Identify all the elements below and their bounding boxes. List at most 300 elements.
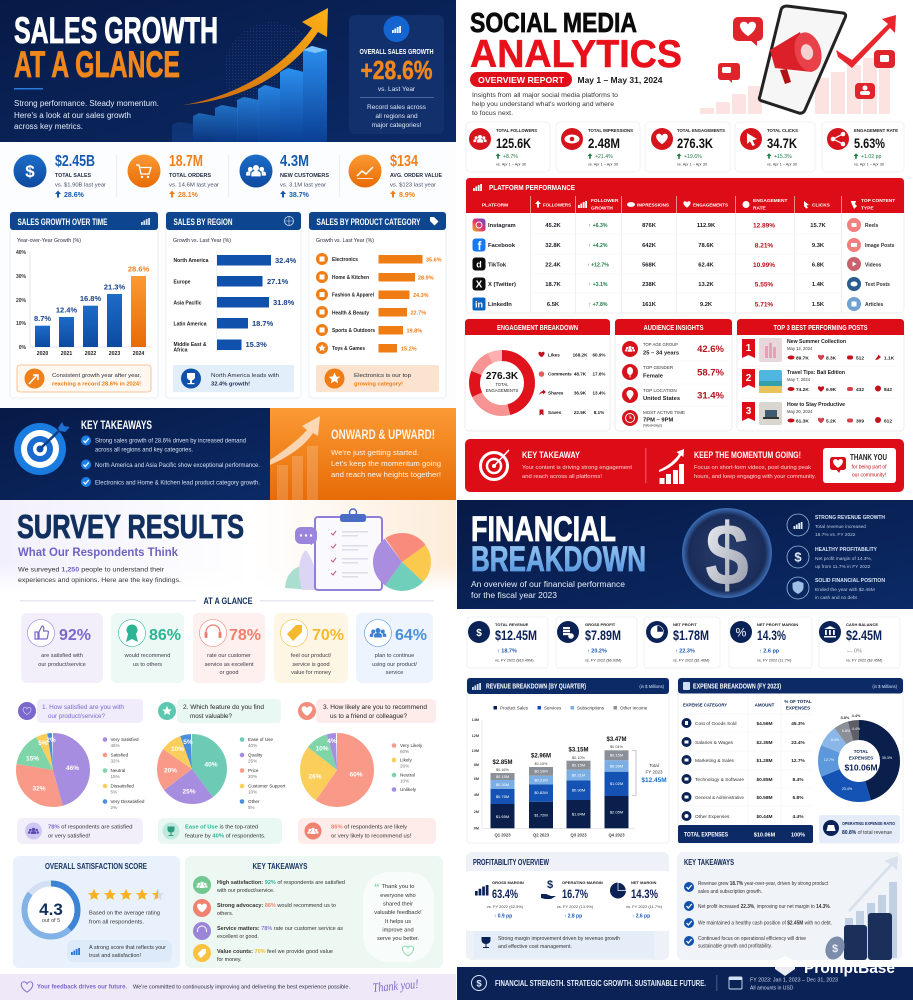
post 3: May 20, 2024 — [787, 409, 813, 414]
kpi: engagement rate: 5.63% — [854, 135, 885, 151]
donut: expenses: TOTAL — [854, 749, 869, 754]
callout: ease of use: feature by 40% of respondents. — [185, 834, 266, 840]
takeaway list: Continued focus on operational efficiency will drive — [698, 936, 806, 942]
icon: momentum chart — [659, 449, 684, 484]
platform logos: in — [475, 300, 483, 310]
table rows: 6.5K — [547, 302, 560, 308]
table rows — [488, 222, 827, 308]
callout: satisfied — [17, 818, 143, 844]
card: audience insights: TOP AGE GROUP — [643, 342, 678, 347]
card: profitability overview — [466, 852, 669, 960]
metric: operating margin: vs. FY 2022 (13.9%) — [557, 904, 594, 909]
metric: operating margin — [541, 879, 603, 920]
table header row: TOP CONTENT — [861, 198, 895, 204]
pie: satisfaction: 46% — [66, 765, 79, 772]
thank you note: everyone who — [380, 893, 416, 899]
table rows: LinkedIn — [488, 302, 512, 308]
table: platform performance: PLATFORM PERFORMANCE — [489, 183, 575, 192]
table rows: 45.2K — [545, 223, 562, 229]
expense table: Other Expenses — [695, 814, 730, 820]
score note: A strong score that reflects your — [89, 945, 166, 951]
bar chart: yoy growth: 21.3% — [104, 283, 125, 292]
kpi: total followers: vs. Apr 1 – Apr 30 — [496, 162, 526, 166]
card: overall satisfaction score: OVERALL SATISFACTION SCORE — [45, 862, 148, 871]
expense table: $0.44M — [756, 814, 773, 820]
callout: north america leads: 32.4% growth! — [211, 382, 250, 388]
score ring: out of 5 — [42, 918, 60, 924]
stacked bar chart: $0.31M — [572, 772, 585, 778]
donut legend: Likes — [548, 352, 560, 358]
stacked bar chart: $1.72M — [534, 812, 548, 818]
takeaway list: Revenue grew 18.7% year-over-year, driven by strong product — [698, 881, 829, 887]
card: expense breakdown: EXPENSE BREAKDOWN (FY 2023) — [693, 682, 781, 690]
post 2: 842 — [884, 387, 892, 393]
card: engagement breakdown — [465, 319, 610, 431]
callout: recommend: or very likely to recommend us! — [331, 834, 412, 840]
kpi: net profit: vs. FY 2022 ($1.46M) — [673, 658, 710, 662]
card: engagement breakdown: ENGAGEMENT BREAKDOWN — [497, 323, 578, 332]
pie: likelihood to recommend: 60% — [349, 772, 363, 778]
stacked bar chart: $0.21M — [534, 778, 548, 782]
post 3: How to Stay Productive — [787, 402, 846, 408]
bar chart: yoy growth: 28.6% — [128, 265, 149, 274]
takeaway items: others. — [217, 911, 233, 917]
card: sales by product category: Growth vs. Last Year (%) — [316, 238, 374, 244]
top content type column: Image Posts — [865, 243, 895, 249]
callout: north america leads — [173, 365, 294, 392]
stacked bar chart: 8M — [474, 763, 479, 767]
card: expense breakdown — [678, 678, 903, 843]
takeaway list: Strong sales growth of 28.6% driven by increased demand — [95, 438, 246, 444]
kpi: total impressions: vs. Apr 1 – Apr 30 — [588, 162, 618, 166]
kpi: gross profit: vs. FY 2022 ($6.93M) — [585, 658, 622, 662]
stat card: 86 percent: us to others — [133, 662, 162, 668]
top content type column: Videos — [865, 262, 882, 268]
post 1: 512 — [856, 356, 864, 362]
card: audience insights: Female — [643, 374, 664, 380]
panel: financial breakdown — [457, 500, 913, 1000]
donut: expenses: 35.3% — [882, 756, 893, 760]
kpi: engagement rate: vs. Apr 1 – Apr 30 — [854, 162, 884, 166]
kpi: total sales: $ — [25, 162, 35, 181]
stat card: 70 percent — [274, 613, 348, 683]
table header row: CLICKS — [812, 202, 831, 208]
legend: satisfaction: 46% — [110, 743, 120, 748]
social intro text: help you understand what's working and where — [472, 102, 615, 108]
pie: valuable feature: 5% — [183, 739, 193, 746]
social title — [470, 7, 682, 76]
overall growth card: OVERALL SALES GROWTH — [360, 47, 434, 56]
question 3: 3. How likely are you to recommend — [323, 704, 427, 711]
score ring: 4.3 — [39, 900, 63, 919]
table rows: 112.9K — [697, 223, 716, 229]
kpi: average order value: vs. $123 last year — [390, 182, 436, 188]
question 1: 1. How satisfied are you with — [42, 704, 124, 711]
stacked bar chart: Q1 2023 — [494, 832, 511, 838]
kpi: net profit margin — [729, 617, 812, 668]
donut: expenses: 4.4% — [852, 727, 861, 731]
table header row: ENGAGEMENT — [753, 198, 787, 204]
kpi: total revenue: TOTAL REVENUE — [495, 622, 529, 627]
stacked bar chart: $0.15M — [496, 774, 509, 779]
kpi: new customers: NEW CUSTOMERS — [280, 173, 330, 179]
chart legend — [494, 706, 648, 710]
stacked bar chart: $1.65M — [496, 814, 509, 819]
expense table: $4.56M — [756, 721, 773, 727]
band: key takeaways: KEY TAKEAWAYS — [81, 418, 152, 432]
overall growth card: all regions and — [375, 113, 418, 120]
donut: engagement — [474, 356, 530, 410]
callout: margin improvement: Strong margin improvement driven by revenue growth — [498, 936, 620, 942]
metric: gross margin — [475, 880, 524, 920]
metric: gross margin: ↑ 0.9 pp — [494, 914, 512, 920]
platform logos: f — [478, 239, 482, 253]
bar chart: growth by category: 22.7% — [410, 310, 426, 316]
kpi: cash balance — [819, 617, 900, 668]
bar chart: yoy growth: 20% — [16, 298, 27, 304]
icon: red target — [480, 450, 509, 480]
card: audience insights: AUDIENCE INSIGHTS — [644, 323, 704, 332]
card: audience insights — [615, 319, 732, 431]
table rows: 8.21% — [755, 242, 773, 250]
sales hero banner — [0, 0, 456, 142]
table rows: Instagram — [488, 223, 516, 229]
watermark: promptbase — [775, 956, 895, 977]
stat card: 64 percent: plan to continue — [375, 653, 414, 659]
legend: likelihood — [392, 743, 423, 792]
donut legend — [538, 352, 606, 416]
stat card: 78 percent: rate our customer — [207, 653, 251, 659]
kpi: total followers — [466, 122, 550, 172]
bar chart: growth by region: Latin America — [174, 322, 207, 328]
card: sales by product category — [309, 212, 446, 398]
stacked bar chart: Q2 2023 — [533, 832, 550, 838]
legend: satisfaction — [103, 737, 145, 810]
card: revenue breakdown by quarter: (in $ Millions) — [639, 684, 665, 689]
card: financial key takeaways — [677, 852, 902, 963]
kpi: average order value: AVG. ORDER VALUE — [390, 173, 443, 179]
takeaway items: for money. — [217, 957, 242, 963]
chart legend: Product Sales — [500, 706, 529, 710]
donut: expenses: 8.4% — [831, 738, 840, 742]
kpi: total sales: vs. $1.90B last year — [55, 182, 106, 188]
donut: expenses: 5.8% — [841, 716, 850, 720]
kpi: average order value: 8.9% — [399, 192, 416, 199]
question 2: 2. Which feature do you find — [183, 704, 264, 711]
metric: operating margin: OPERATING MARGIN — [562, 880, 603, 885]
card: sales by region — [166, 212, 301, 398]
top content type column: Articles — [865, 302, 884, 308]
table header row: GROWTH — [591, 206, 613, 212]
card: engagement breakdown: 276.3K — [486, 371, 519, 382]
band: key takeaway red: Focus on short-form videos, post during peak — [694, 465, 811, 471]
kpi: total sales: TOTAL SALES — [55, 173, 92, 179]
stacked bar chart: 4M — [474, 793, 479, 797]
kpi: new customers — [240, 153, 330, 199]
thank you card — [823, 448, 896, 483]
highlight: solid financial position: SOLID FINANCIAL POSITION — [815, 578, 885, 584]
survey intro text: We surveyed 1,250 people to understand their — [18, 566, 165, 574]
callout: ease of use: Ease of Use is the top-rated — [185, 824, 258, 830]
kpi: total engagements: 276.3K — [677, 135, 713, 151]
stacked bar chart: Q4 2023 — [608, 832, 625, 838]
stacked bar chart: Q3 2023 — [570, 832, 587, 838]
chart legend: Services — [544, 706, 562, 710]
bar chart: growth by category: 15.2% — [401, 346, 417, 352]
kpi: total engagements: vs. Apr 1 – Apr 30 — [677, 162, 707, 166]
legend: likelihood: Neutral — [400, 772, 415, 778]
legend: satisfaction: 2% — [110, 805, 117, 810]
stacked bar chart: $0.30M — [496, 782, 509, 787]
table: platform performance — [466, 178, 904, 313]
pie: satisfaction: 5% — [38, 740, 48, 747]
sales intro text: Here's a look at our sales growth — [14, 111, 131, 120]
donut legend: 168.2K — [573, 352, 588, 358]
bar chart: yoy growth: 30% — [16, 274, 27, 280]
thank you card: for being part of — [851, 464, 887, 470]
report pill and date: OVERVIEW REPORT — [478, 75, 565, 85]
table rows: ↑ +6.3% — [589, 223, 608, 229]
table header row: FOLLOWER — [591, 198, 619, 204]
kpi: total clicks: vs. Apr 1 – Apr 30 — [767, 162, 797, 166]
stat card: 78 percent: 78% — [229, 627, 261, 644]
kpi: engagement rate: ENGAGEMENT RATE — [854, 128, 898, 133]
card: sales by region: Growth vs. Last Year (%) — [173, 238, 231, 244]
card: sales growth over time — [10, 212, 158, 398]
kpi: gross profit: GROSS PROFIT — [585, 622, 616, 627]
overall growth card: +28.6% — [360, 55, 432, 85]
donut legend: Comments — [548, 372, 572, 376]
kpi: total orders: 28.1% — [178, 192, 199, 199]
expense table: 23.4% — [791, 740, 806, 746]
question 1 — [17, 699, 145, 844]
stacked bar chart: FY 2023 — [646, 770, 663, 774]
stacked bar chart: $0.19M — [534, 768, 548, 774]
question 2: most valuable? — [190, 713, 232, 720]
stacked bar chart: 10M — [472, 749, 479, 753]
expense table: Cost of Goods Sold — [695, 721, 737, 727]
card: audience insights: MOST ACTIVE TIME — [643, 410, 685, 415]
takeaway items: High satisfaction: 92% of respondents are satisfied — [217, 880, 345, 886]
stacked bar chart: 2M — [474, 810, 479, 814]
operating expense ratio: OPERATING EXPENSE RATIO — [842, 821, 896, 826]
icon: dollar coin: $ — [705, 505, 749, 604]
table rows: Facebook — [488, 243, 516, 249]
stacked bar chart: Total — [649, 763, 659, 768]
illustration: phone and megaphone — [700, 6, 896, 114]
bar chart: growth by region: 18.7% — [252, 319, 274, 328]
donut legend: 8.1% — [594, 410, 604, 415]
legend: valuable feature: Price — [248, 768, 259, 773]
stacked bar chart: $0.90M — [572, 788, 585, 792]
table total row: TOTAL EXPENSES — [684, 832, 729, 838]
post 1: 1 — [746, 343, 752, 354]
kpi: gross profit: ↑ 20.2% — [587, 648, 607, 654]
bar chart: yoy growth: 12.4% — [56, 306, 77, 315]
pie: valuable feature: 10% — [171, 746, 184, 753]
pie: valuable feature: 20% — [164, 768, 177, 774]
stacked bar chart — [472, 718, 667, 838]
financial footer — [457, 967, 913, 1000]
stacked bar chart: 12M — [472, 734, 479, 738]
donut legend: 17.6% — [592, 372, 606, 376]
stacked bar chart: 0M — [474, 826, 479, 830]
card: sales by product category: SALES BY PRODUCT CATEGORY — [316, 217, 420, 227]
pie: satisfaction — [26, 737, 79, 792]
kpi: new customers: 4.3M — [280, 153, 309, 170]
top content type column — [847, 218, 895, 311]
sales intro text — [14, 99, 159, 131]
stacked bar chart: 14M — [472, 718, 479, 722]
stacked bar chart: $2.85M — [492, 760, 513, 766]
legend: satisfaction: Satisfied — [110, 752, 129, 758]
coins and bars illustration: $ — [832, 943, 838, 955]
legend: valuable feature: 10% — [248, 790, 257, 794]
metric: operating margin: ↑ 2.8 pp — [564, 914, 582, 920]
table rows: X (Twitter) — [488, 282, 516, 288]
pie: likelihood to recommend: 10% — [315, 746, 329, 752]
financial title: FINANCIAL — [471, 510, 616, 549]
metric: net margin: ↑ 2.6 pp — [632, 914, 650, 920]
bar chart: growth by region: 15.3% — [246, 340, 267, 349]
post 3: 612 — [884, 418, 892, 424]
highlight: solid financial position: in cash and no debt — [815, 595, 858, 601]
donut: expenses: 5.8% — [842, 729, 851, 733]
kpi: total followers: 125.6K — [496, 135, 531, 151]
table rows: 13.2K — [698, 282, 715, 288]
card: audience insights: 7PM – 9PM — [643, 418, 673, 424]
kpi: total revenue — [467, 617, 548, 668]
card: sales by region: SALES BY REGION — [174, 217, 232, 227]
callout: electronics — [316, 365, 439, 392]
survey footer: Your feedback drives our future. — [37, 984, 127, 990]
bar chart: yoy growth: 2023 — [109, 351, 120, 357]
table total row: $10.06M — [754, 832, 776, 838]
stat card: 78 percent: service as excellent — [205, 662, 254, 668]
kpi: total revenue: $12.45M — [495, 628, 537, 643]
metric: gross margin: 63.4% — [492, 887, 518, 901]
thank you note: Thank you to — [382, 884, 414, 890]
card: audience insights: 31.4% — [697, 390, 725, 402]
panel: sales growth — [0, 0, 456, 500]
table rows: 15.7K — [810, 223, 827, 229]
stacked bar chart: $0.82M — [534, 790, 548, 795]
legend: satisfaction: 5% — [110, 790, 117, 794]
stacked bar chart: $3.15M — [568, 748, 589, 754]
legend: satisfaction: Neutral — [110, 768, 125, 773]
card: survey key takeaways: KEY TAKEAWAYS — [252, 862, 308, 871]
expense table: $0.58M — [756, 795, 773, 801]
stat card: 78 percent — [193, 613, 265, 683]
thank you note: serve you better. — [377, 936, 419, 942]
band: onward and upward: ONWARD & UPWARD! — [331, 427, 435, 442]
table rows: ↑ +7.8% — [589, 302, 608, 308]
table rows: 32.8K — [545, 243, 562, 249]
band: key takeaway red: Your content is driving strong engagement — [522, 465, 632, 471]
expense table: 12.7% — [791, 758, 806, 764]
financial hero banner — [457, 500, 913, 609]
expense table: EXPENSE CATEGORY — [683, 702, 727, 708]
expense table: EXPENSES — [786, 706, 810, 710]
expense table: 45.3% — [791, 721, 806, 727]
stacked bar chart: $0.04% — [610, 745, 624, 749]
thank you note: valuable feedback! — [374, 910, 422, 916]
donut legend: Saves — [548, 410, 562, 415]
kpi: average order value — [348, 153, 443, 199]
table rows: 642K — [642, 243, 657, 249]
legend: satisfaction: Dissatisfied — [110, 784, 134, 788]
stacked bar chart: $0.75M — [496, 794, 509, 799]
callout: consistent growth: reaching a record 28.6% in 2024! — [52, 382, 141, 388]
takeaway list: across all regions and key categories. — [95, 448, 193, 454]
callout: electronics: Electronics is our top — [354, 373, 411, 379]
band: onward and upward: We're just getting started. — [331, 448, 419, 457]
kpi: net profit — [644, 617, 720, 668]
legend: likelihood: 26% — [400, 764, 409, 768]
stat card: 92 percent: are satisfied with — [41, 653, 83, 659]
expense table: 4.4% — [793, 814, 804, 820]
question 2 — [158, 699, 286, 844]
legend: satisfaction: Very Dissatisfied — [110, 799, 145, 804]
expense table: AMOUNT — [755, 702, 775, 708]
expense table: Technology & Software — [695, 777, 744, 783]
metric: net margin: 14.3% — [631, 887, 658, 901]
bar chart: growth by region: Europe — [174, 280, 191, 286]
sales title: AT A GLANCE — [14, 44, 180, 85]
band: key takeaway red: KEEP THE MOMENTUM GOING! — [694, 450, 801, 461]
bar chart: growth by region: North America — [174, 258, 209, 264]
kpi: total clicks — [735, 122, 815, 172]
callout: consistent growth — [17, 365, 151, 392]
kpi: new customers: vs. 3.1M last year — [280, 182, 326, 188]
callout: consistent growth: Consistent growth year after year, — [52, 373, 141, 379]
expense table: General & Administrative — [695, 795, 744, 801]
kpi: net profit margin: vs. FY 2022 (11.7%) — [757, 658, 792, 662]
financial footer: FY 2023: Jan 1, 2023 – Dec 31, 2023 — [750, 978, 838, 984]
table rows: 5.55% — [755, 282, 773, 288]
donut: expenses: 12.7% — [824, 758, 835, 762]
table header row: ENGAGEMENTS — [693, 202, 729, 208]
watermark: promptbase: PromptBase — [804, 960, 895, 977]
band: key takeaway red — [465, 439, 904, 492]
bar chart: yoy growth: 40% — [16, 250, 27, 256]
table header row: FOLLOWERS — [543, 202, 572, 208]
card: top 3 best performing posts: TOP 3 BEST PERFORMING POSTS — [774, 323, 868, 332]
metric: net margin: vs. FY 2022 (11.7%) — [626, 904, 663, 909]
report pill and date: May 1 – May 31, 2024 — [578, 76, 663, 85]
pie: likelihood to recommend: 26% — [308, 774, 322, 780]
kpi: gross profit — [556, 617, 637, 668]
band: onward and upward: Let's keep the momentum going — [331, 459, 441, 468]
sales title: SALES GROWTH — [14, 10, 218, 51]
takeaway list — [81, 436, 260, 487]
bar chart: growth by category: Toys & Games — [332, 346, 365, 352]
stacked bar chart: 6M — [474, 777, 479, 781]
takeaway list: sales and subscription growth. — [698, 889, 762, 895]
bar chart: yoy growth: 2020 — [37, 351, 48, 357]
pie: valuable feature: 25% — [182, 788, 196, 796]
card: overall satisfaction score: Based on the average rating — [89, 910, 160, 916]
table header row: TYPE — [861, 206, 874, 212]
bar chart: yoy growth: 16.8% — [80, 294, 101, 303]
band: key takeaway red: hours, and keep engaging with your community. — [694, 474, 816, 480]
metric: operating margin: 16.7% — [562, 887, 588, 901]
donut legend: 60.9% — [592, 352, 606, 358]
table rows: 9.2K — [700, 302, 713, 308]
takeaway list: sustainable growth and profitability. — [698, 944, 772, 950]
section heading: at a glance: AT A GLANCE — [204, 596, 252, 606]
kpi: total impressions: 2.48M — [588, 135, 620, 151]
